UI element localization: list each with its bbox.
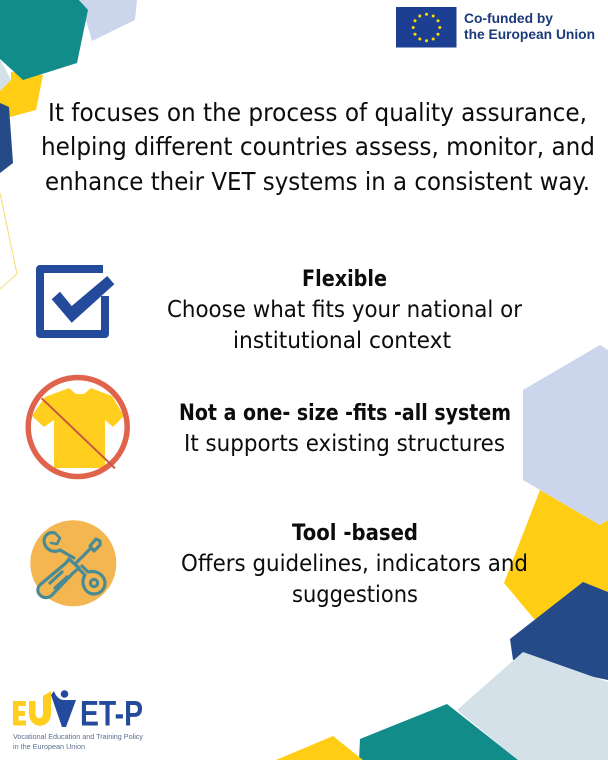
EU funding text	[464, 11, 595, 42]
heading: Not a one- size -fits -all system	[179, 400, 511, 426]
heading: Tool -based	[292, 520, 418, 546]
icon: tools	[30, 520, 116, 606]
screwdriver	[76, 548, 91, 563]
logo tagline: in the European Union	[13, 742, 85, 751]
EUVET-P logo	[13, 690, 143, 751]
EU funding text: the European Union	[464, 27, 595, 42]
EU co-funded logo	[396, 7, 595, 48]
description: Choose what fits your national or	[167, 297, 522, 323]
description: suggestions	[292, 582, 418, 608]
intro paragraph	[41, 98, 595, 196]
icon: crossed-out t-shirt	[28, 378, 127, 476]
description	[167, 297, 522, 354]
description: It supports existing structures	[184, 431, 505, 457]
heading: Flexible	[302, 266, 387, 292]
description: Offers guidelines, indicators and	[181, 551, 528, 577]
item: Tool-based	[181, 520, 528, 608]
bottom-right hexagon decoration	[276, 345, 608, 760]
item: Not a one-size-fits-all	[179, 400, 511, 457]
logo tagline: Vocational Education and Training Policy	[13, 732, 143, 741]
description	[181, 551, 528, 608]
description: institutional context	[233, 328, 451, 354]
wrench	[44, 533, 74, 558]
logo tagline	[13, 732, 143, 751]
EU funding text: Co-funded by	[464, 11, 553, 26]
item: Flexible	[167, 266, 522, 354]
top-left hexagon decoration	[0, 0, 137, 289]
EU flag	[396, 7, 456, 48]
logo mark: ET-P	[80, 694, 143, 734]
icon: checkbox	[40, 269, 114, 334]
